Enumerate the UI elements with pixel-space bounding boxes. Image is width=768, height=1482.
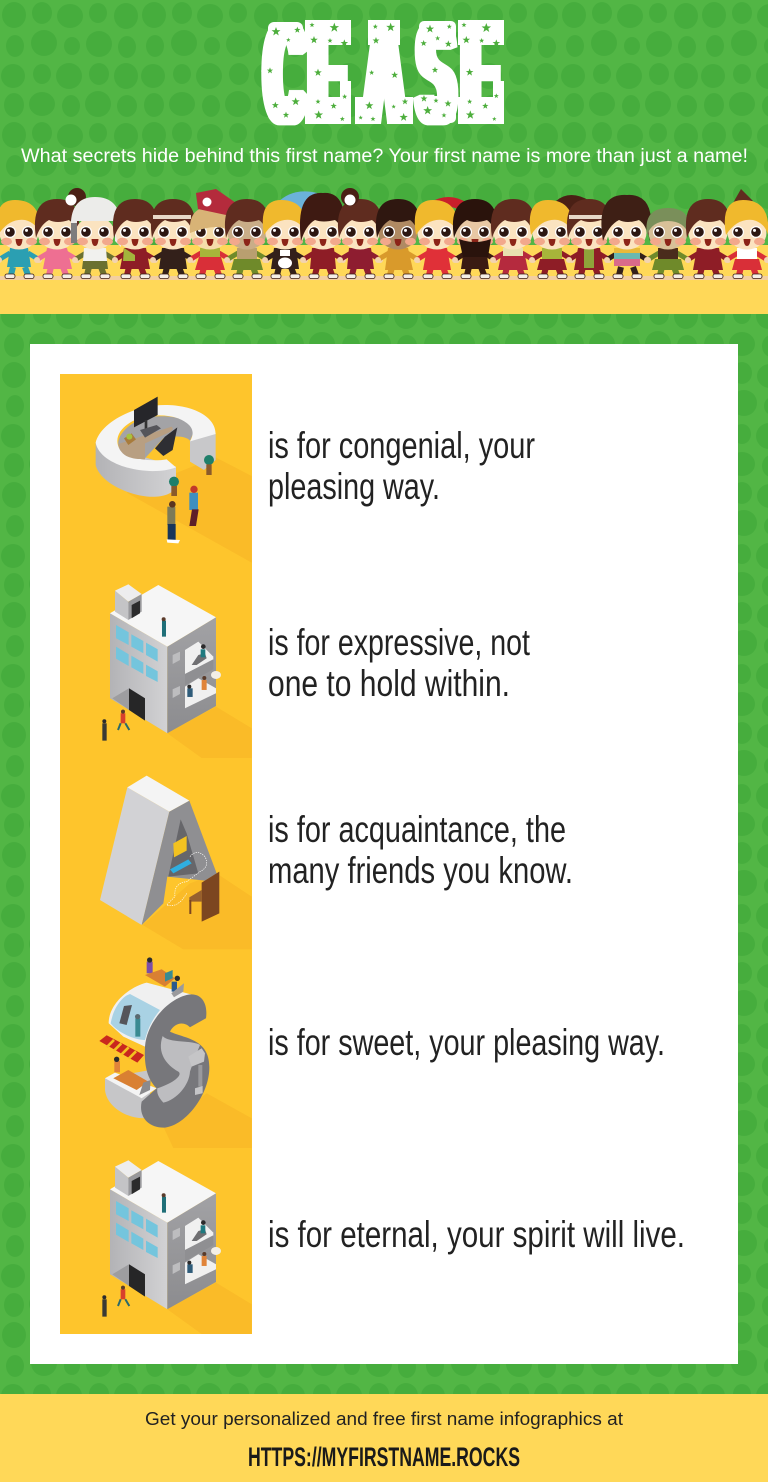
kid 14 bbox=[490, 199, 536, 278]
line C: pleasing way. bbox=[268, 466, 440, 507]
illustration column bbox=[60, 374, 252, 1334]
line C: is for congenial, your bbox=[268, 425, 535, 466]
kid 15 bbox=[529, 195, 590, 278]
subtitle: What secrets hide behind this first name? Your first name is more than just a name! bbox=[21, 146, 748, 167]
kid 1 bbox=[0, 200, 42, 278]
kid 16 bbox=[566, 199, 612, 278]
kid 3 bbox=[71, 197, 121, 278]
line S: is for sweet, your pleasing way. bbox=[268, 1022, 665, 1063]
kid 5 bbox=[150, 199, 196, 278]
letter lines bbox=[268, 425, 685, 1255]
letter E building bbox=[102, 584, 252, 758]
kid 13 bbox=[452, 199, 498, 278]
letter A with chair bbox=[100, 776, 252, 949]
footer url: HTTPS://MYFIRSTNAME.ROCKS bbox=[248, 1442, 520, 1472]
kid 20 bbox=[724, 189, 768, 278]
footer bbox=[0, 1394, 768, 1482]
line E bbox=[268, 622, 531, 704]
title stars bbox=[267, 22, 500, 121]
kid 6 bbox=[187, 189, 236, 278]
line E: one to hold within. bbox=[268, 663, 510, 704]
row of cartoon kids bbox=[0, 188, 768, 278]
kid 10 bbox=[337, 188, 383, 278]
line C bbox=[268, 425, 535, 507]
kid 12 bbox=[414, 197, 467, 278]
kid 4 bbox=[112, 199, 158, 278]
kid 8 bbox=[262, 191, 317, 278]
line A: is for acquaintance, the bbox=[268, 809, 566, 850]
kid 2 bbox=[34, 188, 86, 278]
white content panel bbox=[30, 344, 738, 1364]
title: CEASE bbox=[261, 0, 504, 156]
line A: many friends you know. bbox=[268, 850, 573, 891]
kid 7 bbox=[224, 199, 272, 278]
kid 19 bbox=[685, 199, 731, 278]
kid 11 bbox=[375, 199, 421, 278]
line E: is for expressive, not bbox=[268, 622, 531, 663]
kid 9 bbox=[300, 193, 346, 278]
yellow ground band bbox=[0, 245, 768, 314]
line A bbox=[268, 809, 573, 891]
letter S building bbox=[99, 957, 252, 1148]
letter C reception desk bbox=[96, 397, 252, 563]
second E building bbox=[102, 1160, 252, 1334]
footer prompt: Get your personalized and free first name infographics at bbox=[145, 1409, 623, 1429]
kid 17 bbox=[601, 195, 651, 278]
kid 18 bbox=[645, 208, 691, 278]
